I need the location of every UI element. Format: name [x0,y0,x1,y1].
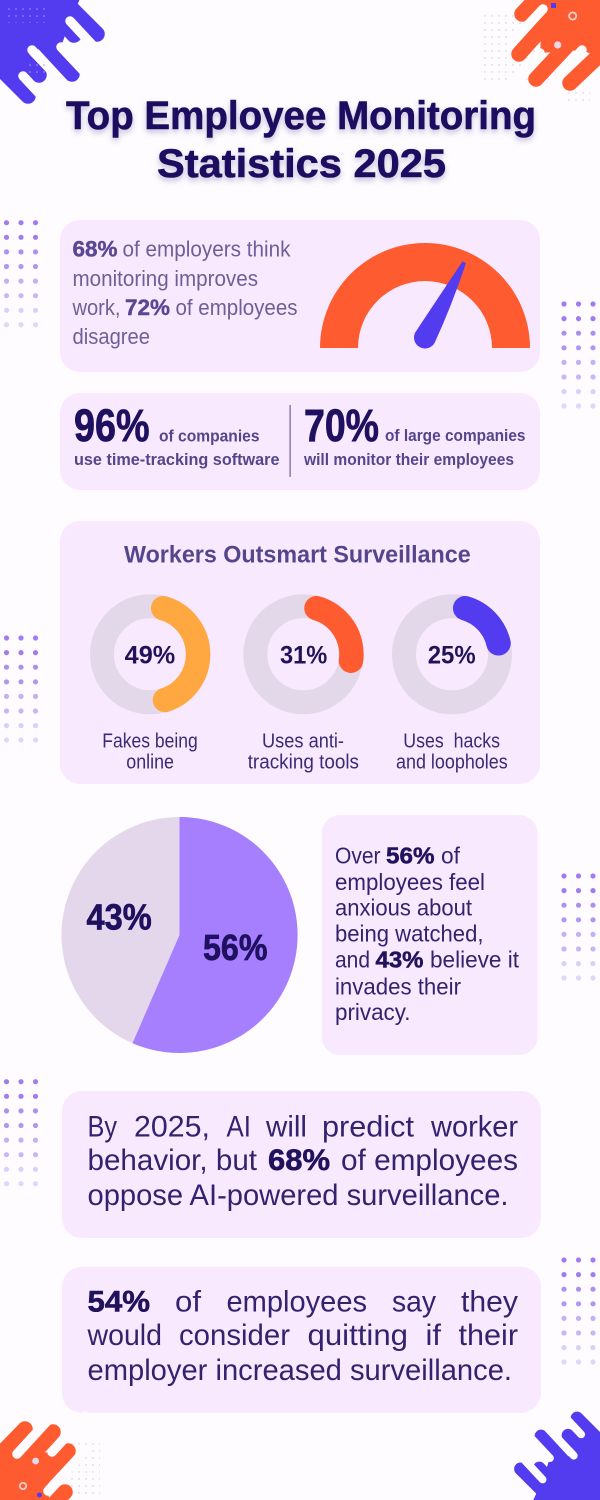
panel: quitting over surveillance: employer increased surveillance. [88,1354,512,1387]
stat: 70% of large companies: of large companies [385,427,526,445]
text block: employers vs employees: 72% [125,295,170,320]
panel: AI surveillance: of employees [341,1144,518,1177]
stat: 96% of companies: 96% [74,400,150,451]
panel: quitting over surveillance: consider [179,1319,290,1352]
panel: anxiety text: employees feel [335,869,485,895]
decoration: bottom-left orange blob [0,1416,100,1500]
donut: 31% anti-tracking tools: 31% [280,641,327,669]
donut: 25% hacks and loopholes [396,606,508,773]
donut: 25% hacks and loopholes: 25% [428,641,476,669]
decoration: dot grid left 2 [4,635,38,743]
stat: 70% of large companies [303,400,526,469]
heading: Workers Outsmart Surveillance [124,542,471,569]
panel: quitting over surveillance: say [392,1286,436,1319]
panel: AI surveillance: 68% [268,1144,330,1177]
panel: quitting over surveillance: they [461,1286,518,1319]
panel: anxiety text: believe it [430,947,520,973]
panel: anxiety text: privacy. [335,999,410,1025]
panel: anxiety text: being watched, [335,921,484,947]
panel: 96% and 70% stats [60,393,540,490]
decoration: dot grid left 3 [4,1079,38,1186]
panel: AI surveillance: behavior, but [88,1144,258,1177]
gauge chart [320,243,530,349]
panel: anxiety text: invades their [335,973,461,999]
pie chart: 56% and 43%: 56% [203,927,268,968]
panel: AI surveillance: oppose AI-powered surveillance. [88,1179,508,1212]
panel: anxiety text: of [441,842,461,868]
pie chart: 56% and 43%: 43% [86,896,152,937]
gauge needle [414,262,466,349]
panel: quitting over surveillance: quitting [308,1319,408,1352]
decoration: dot grid right 3 [561,1257,596,1365]
decoration: dot grid right 1 [561,301,596,409]
donut: 49% fakes being online: 49% [125,641,175,669]
stat: 96% of companies: of companies [159,428,260,446]
decoration: dot grid right 2 [561,873,596,981]
panel: anxiety text: anxious about [335,895,473,921]
decoration: dot grid left 1 [4,220,38,327]
donut: 25% hacks and loopholes: and loopholes [396,751,508,773]
panel: anxiety text: 43% [376,947,424,973]
donut: 49% fakes being online: online [126,751,174,773]
panel: quitting over surveillance: employees [226,1286,367,1319]
panel: AI surveillance: will [265,1111,307,1144]
panel: AI surveillance: 2025, [134,1111,210,1144]
decoration: bottom-right purple blob [520,1411,600,1500]
panel: AI surveillance: AI [226,1111,251,1144]
stat: 96% of companies [74,400,280,469]
text block: employers vs employees [72,237,298,349]
panel: anxiety text: 56% [386,842,434,868]
donut: 49% fakes being online: Fakes being [102,730,198,752]
pie chart: 56% and 43% [62,817,298,1053]
text block: employers vs employees: monitoring improves [72,266,258,291]
donut: 49% fakes being online [102,606,198,773]
panel: AI surveillance [62,1091,541,1238]
donut: 25% hacks and loopholes: Uses hacks [403,730,500,752]
panel: quitting over surveillance: their [458,1319,518,1352]
title: Statistics 2025 [157,142,446,186]
panel: quitting over surveillance: would [87,1319,162,1352]
panel: anxiety text: Over [335,842,381,868]
panel: workers outsmart surveillance [60,521,540,784]
text block: employers vs employees: of employees [176,295,298,320]
decoration: top-right orange blob [483,0,600,106]
panel: AI surveillance: By [88,1111,117,1144]
panel: AI surveillance: predict [322,1111,415,1144]
decoration: top-left purple blob [0,0,97,105]
donut: 31% anti-tracking tools: tracking tools [248,751,359,773]
donut: 31% anti-tracking tools: Uses anti- [262,730,344,752]
panel: quitting over surveillance [62,1267,541,1413]
donut: 31% anti-tracking tools [248,606,359,773]
stat: 96% of companies: use time-tracking software [74,451,280,469]
title [66,94,536,186]
text block: employers vs employees: 68% [72,237,118,262]
text block: employers vs employees: work, [72,295,120,320]
title: Top Employee Monitoring [66,94,536,138]
panel: AI surveillance: worker [430,1111,518,1144]
panel: 68% employers gauge [60,220,540,372]
panel: quitting over surveillance: if [426,1319,442,1352]
stat: 70% of large companies: 70% [304,400,379,451]
panel: anxiety text: and [335,947,370,973]
text block: employers vs employees: of employers think [122,237,291,262]
panel: quitting over surveillance: 54% [88,1286,150,1319]
stat: 70% of large companies: will monitor their employees [303,451,514,469]
panel: anxiety text [322,815,538,1055]
text block: employers vs employees: disagree [72,324,150,349]
panel: quitting over surveillance: of [175,1286,202,1319]
